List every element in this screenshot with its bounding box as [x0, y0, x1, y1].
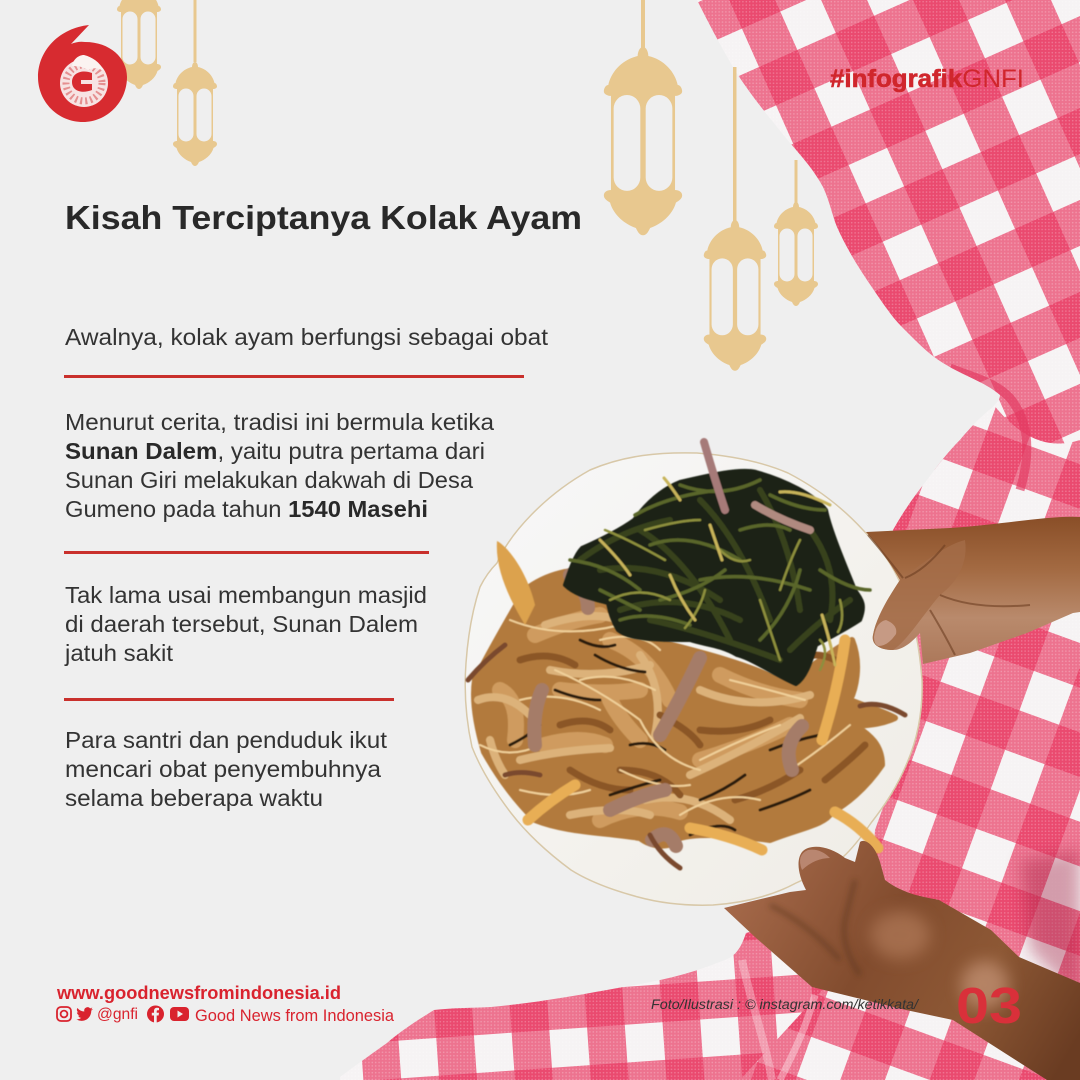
lantern: small right: [774, 160, 818, 306]
shredded chicken: [468, 541, 905, 868]
text: paragraph Sunan Dalem: Sunan Giri melakukan dakwah di Desa: [65, 467, 474, 493]
thumb: [873, 540, 966, 650]
thumb nail: [800, 850, 830, 870]
divider 2: [64, 551, 429, 554]
text: paragraph Sunan Dalem: Menurut cerita, tradisi ini bermula ketika: [65, 409, 495, 435]
icon: facebook: [147, 1006, 164, 1022]
greens: [565, 442, 870, 684]
icon: instagram: [57, 1007, 71, 1021]
lantern: far left cut off: [117, 0, 161, 89]
page number: 03: [956, 977, 1022, 1034]
palm highlight: [870, 911, 930, 959]
plate: [465, 453, 922, 905]
hand: bottom right: [724, 841, 1080, 1080]
wrist highlight: [961, 961, 1009, 1009]
thumb nail: [874, 620, 896, 646]
hashtag: #infografikGNFI: [830, 65, 1024, 93]
title: Kisah Terciptanya Kolak Ayam: [65, 199, 582, 236]
text: paragraph santri: selama beberapa waktu: [65, 785, 323, 811]
text: paragraph Sunan Dalem: Gumeno pada tahun 1540 Masehi: [65, 496, 428, 522]
handle: @gnfi: [97, 1006, 138, 1023]
text: paragraph masjid: jatuh sakit: [64, 640, 173, 666]
finger creases: [770, 880, 860, 975]
text: paragraph santri: mencari obat penyembuhnya: [65, 756, 382, 782]
hand: top right: [866, 517, 1080, 664]
golden wedge: [497, 541, 535, 625]
logo: GNFI: [38, 25, 127, 122]
plate of kolak ayam: [465, 442, 922, 905]
text: paragraph santri: Para santri dan penduduk ikut: [65, 727, 387, 753]
text: paragraph Sunan Dalem: [65, 409, 495, 522]
icon: twitter: [76, 1007, 93, 1021]
lantern: large centre: [604, 0, 682, 235]
text: intro line: Awalnya, kolak ayam berfungsi sebagai obat: [65, 324, 548, 350]
photo credit: Foto/Ilustrasi : © instagram.com/ketikkata/: [651, 997, 919, 1012]
lantern: left with chain: [173, 0, 217, 166]
icon: youtube: [170, 1007, 189, 1021]
divider 3: [64, 698, 394, 701]
text: paragraph masjid: Tak lama usai membangun masjid: [65, 582, 427, 608]
text: paragraph masjid: di daerah tersebut, Sunan Dalem: [65, 611, 418, 637]
page name: Good News from Indonesia: [195, 1006, 395, 1025]
footer: social row: [57, 1006, 395, 1025]
text: paragraph santri: [65, 727, 387, 811]
text: paragraph Sunan Dalem: Sunan Dalem, yaitu putra pertama dari: [65, 438, 485, 464]
divider 1: [64, 375, 524, 378]
text: paragraph masjid: [64, 582, 427, 666]
footer: website: www.goodnewsfromindonesia.id: [56, 982, 341, 1003]
checkered cloth: [330, 0, 1080, 1080]
lantern: medium: [704, 67, 766, 371]
